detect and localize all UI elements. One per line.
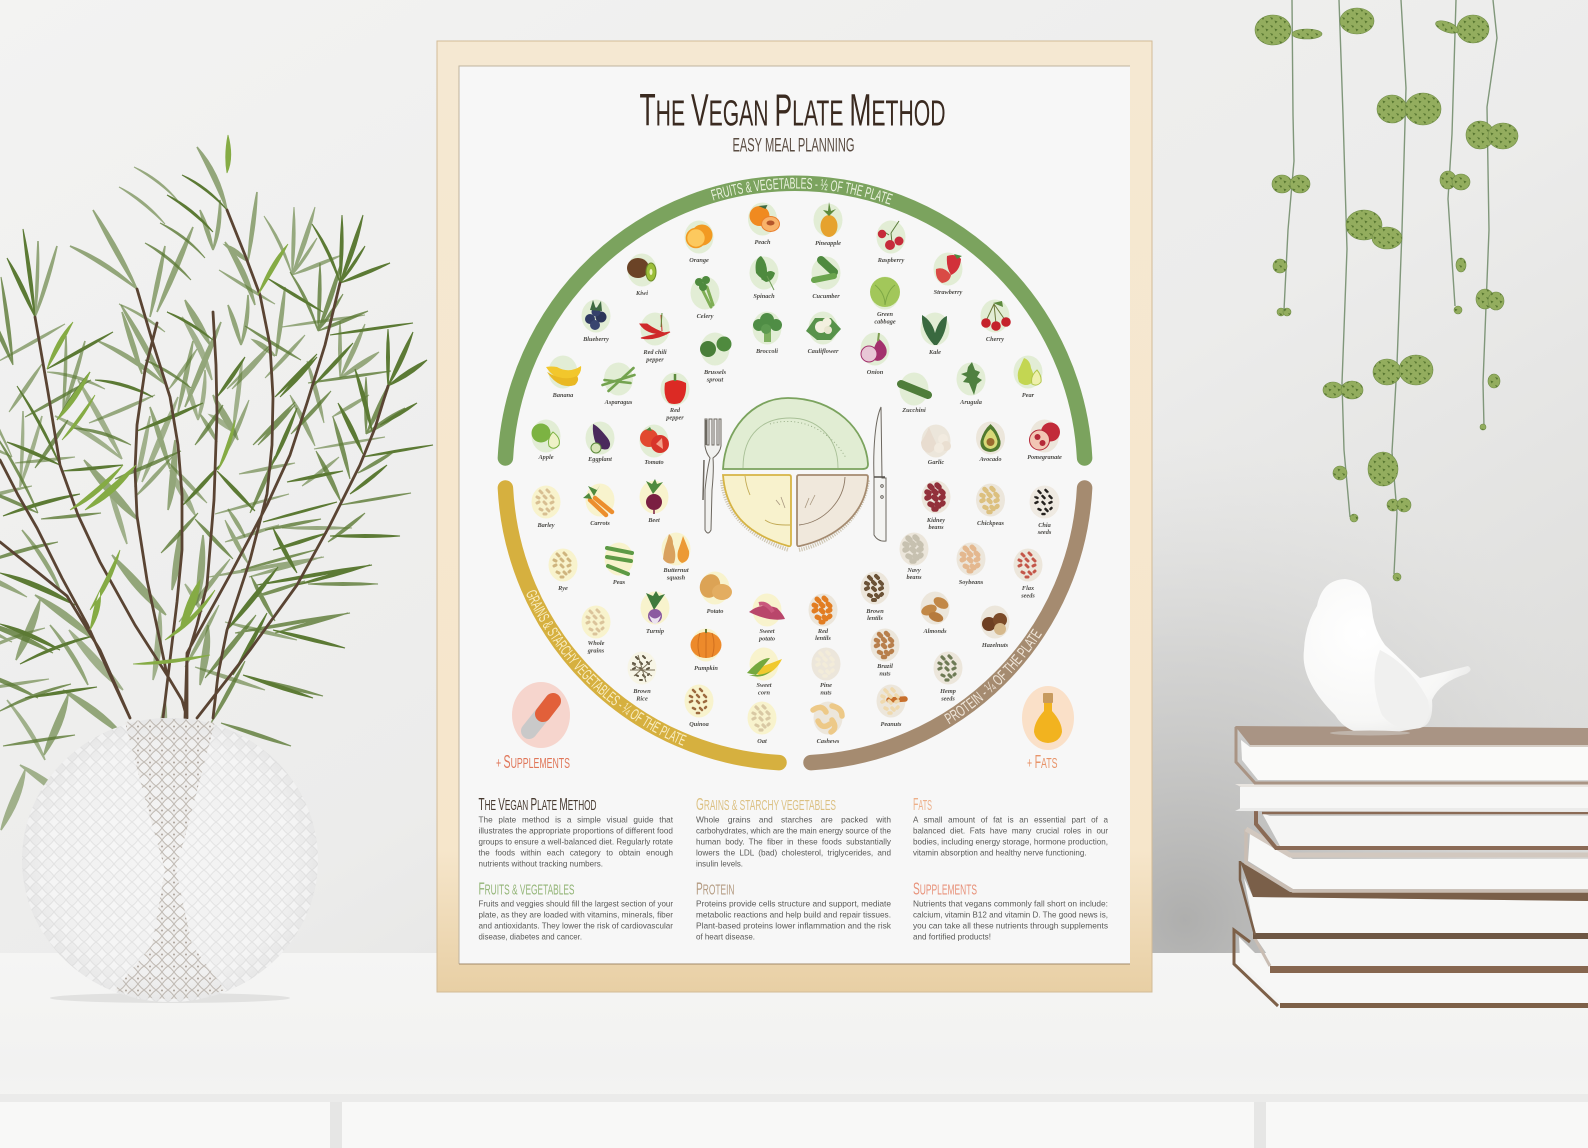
text block: Fats <box>913 794 1108 858</box>
food: Eggplant <box>586 422 614 463</box>
food: Chia seeds <box>1030 486 1060 536</box>
food: Pumpkin <box>690 628 722 672</box>
food: Red lentils: lentils <box>815 635 831 642</box>
text block: The Vegan Plate Method: The plate method is a simple visual guide that <box>478 814 674 824</box>
icon: oil bottle <box>1022 686 1074 750</box>
text block: Grains and starchy vegetables <box>696 794 892 868</box>
food: Brown Rice: Rice <box>635 696 648 702</box>
food: Turnip <box>640 591 670 635</box>
food: Apple <box>532 420 560 461</box>
plate: grains quarter <box>723 475 791 546</box>
text block: Fats: vitamin absorption and healthy nerve functioning. <box>913 848 1086 858</box>
white bird figurine <box>1304 579 1471 736</box>
arc: grains and starchy vegetables: GRAINS & STARCHY VEGETABLES - ¼ OF THE PLATE <box>526 590 687 746</box>
food: Peas: Peas <box>613 579 626 586</box>
food: Tomato <box>640 424 669 466</box>
food: Raspberry <box>876 220 906 264</box>
food: Brazil nuts: Brazil <box>876 663 893 670</box>
food: Whole grains: Whole <box>588 640 605 647</box>
food: Chickpeas <box>976 484 1005 527</box>
food: Pear <box>1014 356 1042 399</box>
food: Brown lentils: lentils <box>867 615 883 622</box>
food: Hemp seeds: Hemp <box>939 688 956 695</box>
vine leaves <box>1255 8 1518 581</box>
text block: Fats: bodies, including energy storage, hormone production, <box>913 836 1108 846</box>
food: Brussels sprout: sprout <box>706 376 723 384</box>
food: Quinoa <box>684 684 714 728</box>
food: Broccoli <box>752 312 782 355</box>
food: Brazil nuts <box>870 628 900 678</box>
food: Hazelnuts: Hazelnuts <box>981 642 1009 649</box>
food: Peanuts <box>876 684 906 728</box>
text block: Grains and starchy vegetables: insulin levels. <box>696 858 743 868</box>
text block: Fats: A small amount of fat is an essential part of a <box>913 814 1108 824</box>
food illustrations: grains and starchy vegetables <box>532 479 785 745</box>
text block: Protein: of heart disease. <box>696 932 755 942</box>
food: Oat: Oat <box>757 738 767 745</box>
food: Pine nuts: Pine <box>820 682 832 689</box>
fork <box>705 419 721 533</box>
food: Cherry: Cherry <box>986 336 1004 343</box>
food: Sweet corn <box>747 648 782 696</box>
food: Beet: Beet <box>647 517 660 524</box>
food: Raspberry: Raspberry <box>877 257 904 264</box>
food: Green cabbage <box>870 276 900 326</box>
food: Hemp seeds <box>934 652 962 702</box>
food: Butternut squash: Butternut <box>662 567 689 574</box>
food: Red chili pepper <box>640 312 670 364</box>
food: Kale: Kale <box>928 349 941 356</box>
food: Red lentils <box>808 594 838 642</box>
poster title: THE VEGAN PLATE METHOD <box>640 84 946 136</box>
text block: Supplements: Nutrients that vegans commonly fall short on include: <box>913 898 1108 908</box>
food: Garlic <box>921 424 951 466</box>
text block: The Vegan Plate Method: THE VEGAN PLATE METHOD <box>478 794 596 814</box>
food: Pumpkin: Pumpkin <box>694 665 718 672</box>
food: Chickpeas: Chickpeas <box>977 520 1005 527</box>
food: Orange <box>684 220 714 264</box>
food: Brown Rice: Brown <box>632 688 651 695</box>
knife <box>874 407 886 541</box>
food: Kiwi <box>627 254 656 297</box>
food: Pine nuts: nuts <box>820 690 832 696</box>
food: Turnip: Turnip <box>646 628 664 635</box>
food: Green cabbage: Green <box>877 311 894 318</box>
text block: The Vegan Plate Method <box>478 794 674 868</box>
food: Rye <box>548 548 578 592</box>
food: Cherry <box>980 300 1011 343</box>
dark green leaves <box>0 167 433 746</box>
stems <box>0 210 388 718</box>
food: Barley: Barley <box>536 522 555 529</box>
food: Pomegranate <box>1027 420 1062 461</box>
food: Whole grains: grains <box>587 648 605 654</box>
food: Soybeans: Soybeans <box>959 579 984 586</box>
food: Brown lentils: Brown <box>865 608 884 615</box>
food: Flax seeds <box>1014 548 1042 600</box>
food: Asparagus: Asparagus <box>604 399 633 406</box>
food: Peach <box>748 202 780 246</box>
text block: Supplements <box>913 878 1108 942</box>
plate: vegetable half <box>723 398 868 469</box>
food: Brazil nuts: nuts <box>879 670 891 678</box>
food: Beet <box>640 479 668 524</box>
food: Flax seeds: Flax <box>1022 585 1034 592</box>
text block: Grains and starchy vegetables: GRAINS & STARCHY VEGETABLES <box>696 794 836 814</box>
text block: Fruits and vegetables <box>478 878 673 942</box>
text block: Grains and starchy vegetables: carbohydrates, which are the main energy source of the <box>696 826 891 836</box>
food: Pine nuts <box>812 648 840 696</box>
food: Sweet corn: Sweet <box>756 682 772 689</box>
food: Cauliflower: Cauliflower <box>808 348 839 355</box>
text block: Supplements: calcium, vitamin B12 and vitamin D. The good news is, <box>913 910 1108 920</box>
food: Spinach: Spinach <box>753 293 775 300</box>
text block: Fruits and vegetables: disease, diabetes and cancer. <box>478 932 582 942</box>
food: Orange: Orange <box>689 257 709 264</box>
food: Barley <box>532 486 560 529</box>
hanging vines <box>1255 0 1518 581</box>
food: Brussels sprout <box>700 332 732 384</box>
food: Blueberry: Blueberry <box>582 336 609 343</box>
food: Flax seeds: seeds <box>1020 592 1035 600</box>
callout: supplements <box>496 682 570 772</box>
food: Hemp seeds: seeds <box>940 696 955 702</box>
food: Arugula: Arugula <box>959 399 982 406</box>
food: Eggplant: Eggplant <box>587 456 612 463</box>
text block: Supplements: you can take all these nutrients through supplements <box>913 920 1108 930</box>
food: Strawberry <box>934 252 963 296</box>
text block: Protein <box>696 878 892 942</box>
plate shadow hatching <box>722 480 868 550</box>
food: Peanuts: Peanuts <box>880 721 902 728</box>
food: Hazelnuts <box>980 606 1010 649</box>
food: Oat <box>748 702 776 745</box>
stack of books <box>1234 726 1588 1008</box>
food: Pineapple: Pineapple <box>815 240 841 247</box>
food illustrations: protein <box>808 420 1062 745</box>
text block: The Vegan Plate Method: groups to ensure a well-balanced diet. Regularly rotate <box>478 836 673 846</box>
food: Red chili pepper: Red chili <box>642 349 667 356</box>
food: Butternut squash: squash <box>666 574 686 582</box>
food: Red chili pepper: pepper <box>645 356 664 364</box>
food: Pomegranate: Pomegranate <box>1027 454 1062 461</box>
food: Brussels sprout: Brussels <box>703 369 727 376</box>
food: Sweet potato <box>749 594 785 642</box>
food: Potato <box>696 571 732 615</box>
icon: capsule pill <box>512 682 570 748</box>
food: Chia seeds: seeds <box>1037 529 1052 536</box>
food: Arugula <box>956 362 986 406</box>
text block: Fruits and vegetables: and antioxidants. They lower the risk of cardiovascular <box>478 920 673 930</box>
food: Kidney beans: Kidney <box>926 517 945 524</box>
arc: fruits and vegetables <box>498 176 1092 466</box>
text block: Fruits and vegetables: plate, as they are loaded with vitamins, minerals, fiber <box>478 910 673 920</box>
text block: Grains and starchy vegetables: human body. The fiber in these foods substantially <box>696 836 892 846</box>
food: Celery <box>690 276 720 320</box>
food: Navy beans: beans <box>906 574 922 581</box>
arc: protein <box>803 480 1092 770</box>
food: Pineapple <box>814 202 842 247</box>
plate ring: three coloured arcs with labels <box>498 176 1092 770</box>
arc: protein: PROTEIN - ¼ OF THE PLATE <box>944 628 1042 724</box>
text block: Fats: balanced diet. Fats have many crucial roles in our <box>913 826 1108 836</box>
food: Blueberry <box>582 300 610 343</box>
callout: fats: + FATS <box>1027 752 1058 772</box>
callout: supplements: + SUPPLEMENTS <box>496 752 570 772</box>
text block: Fruits and vegetables: FRUITS & VEGETABLES <box>478 878 574 898</box>
text block: Protein: metabolic reactions and help build and repair tissues. <box>696 910 891 920</box>
callout: fats <box>1022 686 1074 772</box>
food: Quinoa: Quinoa <box>689 721 709 728</box>
food: Carrots: Carrots <box>590 520 610 527</box>
wooden picture frame <box>437 41 1152 992</box>
bright green leaves <box>47 135 288 664</box>
food: Garlic: Garlic <box>928 459 944 466</box>
text block: Protein: Plant-based proteins lower inflammation and the risk <box>696 920 892 930</box>
food: Cucumber: Cucumber <box>812 293 840 300</box>
food: Onion: Onion <box>867 369 884 376</box>
arc: grains and starchy vegetables <box>498 480 787 770</box>
food: Avocado: Avocado <box>979 456 1001 463</box>
text block: Grains and starchy vegetables: Whole grains and starches are packed with <box>696 814 891 824</box>
text block: Protein: PROTEIN <box>696 878 734 898</box>
food: Potato: Potato <box>707 608 723 615</box>
food: Brown Rice <box>628 652 656 702</box>
food: Spinach <box>750 256 778 300</box>
food: Pear: Pear <box>1022 392 1035 399</box>
text block: Supplements: and fortified products! <box>913 932 991 942</box>
food illustrations: fruits and vegetables <box>532 202 1042 466</box>
food: Tomato: Tomato <box>644 459 664 466</box>
food: Kale <box>920 312 950 356</box>
poster subtitle: EASY MEAL PLANNING <box>732 136 854 156</box>
text block: Grains and starchy vegetables: lowers the LDL (bad) cholesterol, triglycerides, and <box>696 848 891 858</box>
food: Rye: Rye <box>557 585 568 592</box>
food: Cucumber <box>812 256 840 300</box>
shelf and drawers <box>0 953 1588 1148</box>
food: Strawberry: Strawberry <box>934 289 963 296</box>
food: Apple: Apple <box>537 454 554 461</box>
food: Celery: Celery <box>697 313 714 320</box>
food: Red pepper: pepper <box>665 414 684 422</box>
food: Navy beans: Navy <box>906 567 921 574</box>
text block: Fruits and vegetables: Fruits and veggies should fill the largest section of your <box>478 898 673 908</box>
food: Cauliflower <box>806 312 841 355</box>
food: Peas <box>604 542 634 586</box>
food: Banana: Banana <box>552 392 573 399</box>
food: Red lentils: Red <box>817 628 829 635</box>
food: Banana <box>546 356 581 399</box>
food: Carrots <box>583 484 614 527</box>
arc: fruits and vegetables: FRUITS & VEGETABLES - ½ OF THE PLATE <box>710 178 893 205</box>
food: Almonds <box>920 592 950 635</box>
food: Zucchini <box>900 372 928 414</box>
food: Zucchini: Zucchini <box>901 407 926 414</box>
food: Sweet potato: potato <box>758 636 775 642</box>
food: Navy beans <box>900 532 928 581</box>
food: Butternut squash <box>662 532 690 582</box>
plate: protein quarter <box>797 475 868 546</box>
food: Green cabbage: cabbage <box>874 318 896 326</box>
food: Red pepper: Red <box>669 407 681 414</box>
food: Asparagus <box>602 362 634 406</box>
food: Almonds: Almonds <box>922 628 947 635</box>
text block: Protein: Proteins provide cells structure and support, mediate <box>696 898 891 908</box>
food: Peach: Peach <box>754 239 771 246</box>
plate sketch lines <box>743 418 838 468</box>
text block: The Vegan Plate Method: nutrients without tracking numbers. <box>478 858 603 868</box>
food: Sweet corn: corn <box>758 690 770 696</box>
food: Kiwi: Kiwi <box>635 290 648 297</box>
central plate with cutlery <box>703 398 886 550</box>
food: Avocado <box>976 422 1005 463</box>
text block: The Vegan Plate Method: the foods within each category to obtain enough <box>478 848 673 858</box>
food: Cashews: Cashews <box>817 738 840 745</box>
food: Chia seeds: Chia <box>1038 522 1051 529</box>
food: Sweet potato: Sweet <box>759 628 775 635</box>
food: Red pepper <box>660 372 690 422</box>
food: Brown lentils <box>860 572 890 622</box>
khaki leaves <box>1 147 285 830</box>
food: Kidney beans: beans <box>928 524 944 531</box>
food: Broccoli: Broccoli <box>755 348 778 355</box>
text block: Fats: FATS <box>913 794 932 814</box>
glass vase <box>22 718 318 1003</box>
food: Kidney beans <box>922 480 950 531</box>
food: Onion <box>860 332 890 376</box>
food: Cashews <box>813 702 842 745</box>
plant branches and leaves <box>0 135 433 830</box>
text block: The Vegan Plate Method: illustrates the appropriate proportions of different food <box>478 826 673 836</box>
food: Whole grains <box>582 606 610 654</box>
text block: Supplements: SUPPLEMENTS <box>913 878 977 898</box>
food: Soybeans <box>956 542 986 586</box>
